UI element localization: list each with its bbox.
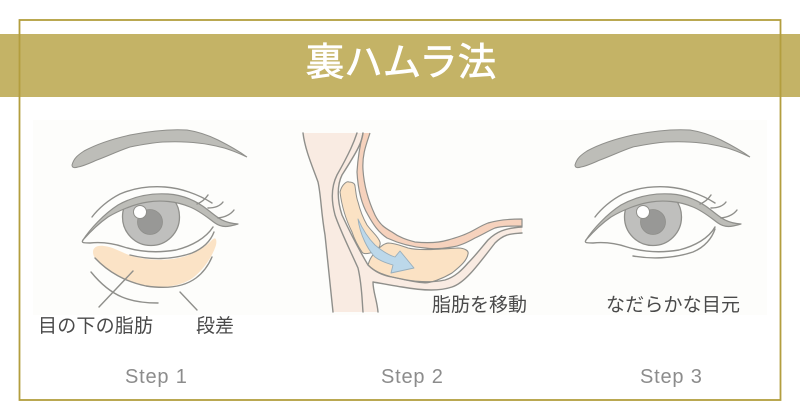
eyelashes <box>197 195 234 218</box>
label: fat: 目の下の脂肪 <box>38 315 153 337</box>
skin tissue <box>303 133 522 312</box>
panel: step 3 smooth eye <box>575 130 750 316</box>
pink orbital band <box>357 133 522 249</box>
title banner <box>0 34 800 97</box>
pupil <box>138 210 162 234</box>
panel: step 2 cross section <box>303 133 527 316</box>
leader line: step <box>180 292 197 310</box>
lower eyelid and crease lines <box>82 187 214 303</box>
icon: eyebrow <box>575 130 750 168</box>
illustration background <box>33 120 767 315</box>
eye highlight <box>134 206 146 218</box>
label: step 3: Step 3 <box>640 366 703 388</box>
lower fat lobe <box>368 243 468 283</box>
label: step 1: Step 1 <box>125 366 188 388</box>
label: step difference: 段差 <box>196 315 234 337</box>
tissue lines <box>303 133 522 312</box>
upper fat lobe <box>340 182 380 254</box>
label: smooth eye area: なだらかな目元 <box>606 295 740 316</box>
icon: eyebrow <box>72 130 247 168</box>
title: 裏ハムラ法 <box>306 42 496 84</box>
iris <box>122 202 180 246</box>
under-eye fat <box>93 238 216 287</box>
eye highlight <box>636 206 650 218</box>
panel: step 1 eye with under-eye fat <box>38 130 247 337</box>
arrow: fat movement <box>358 219 414 273</box>
label: move fat: 脂肪を移動 <box>432 294 527 316</box>
lower eyelid and crease lines <box>585 187 715 258</box>
upper eyelid <box>586 194 741 240</box>
upper eyelid <box>83 194 238 240</box>
eyelashes <box>700 195 737 218</box>
pupil <box>640 210 666 234</box>
leader line: fat <box>99 271 133 307</box>
iris <box>624 202 682 246</box>
label: step 2: Step 2 <box>381 366 444 388</box>
